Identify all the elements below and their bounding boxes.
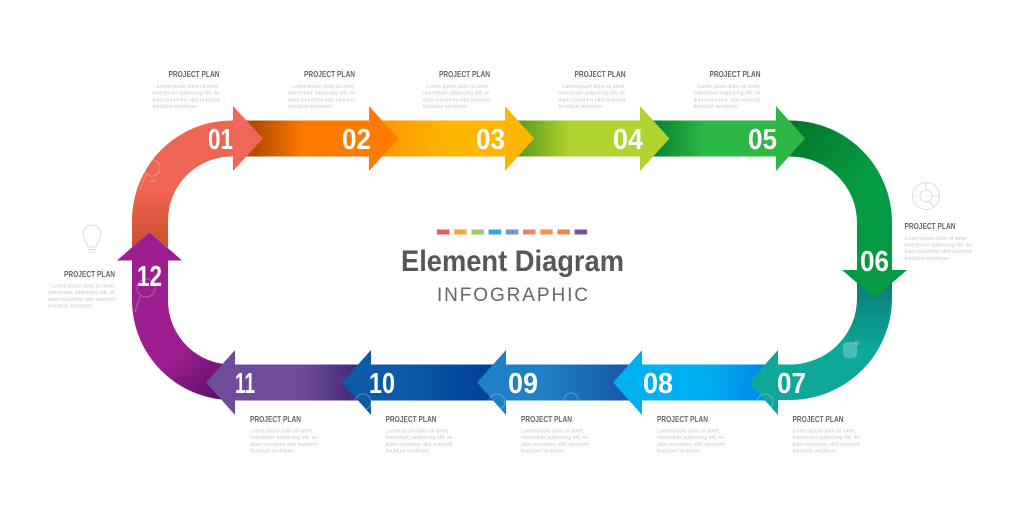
text block 06: Lorem ipsum dolor sit amet,	[904, 236, 968, 242]
text block 06	[904, 222, 972, 262]
text block 11: nsectetuer adipiscing elit, se	[250, 435, 317, 441]
icon: ring chart	[912, 182, 940, 210]
text block 11	[250, 415, 317, 454]
text block 07: tincidunt sectetuer.	[792, 448, 838, 454]
text block 11: diam nonummy nibh euismod	[250, 442, 317, 448]
text block 02: Lorem ipsum dolor sit amet,	[292, 84, 355, 90]
segment 06 curved arrow	[782, 120, 907, 298]
segment 02 arrow: 02	[342, 124, 371, 156]
text block 03: tincidunt sectetuer.	[423, 104, 468, 110]
text block 08: PROJECT PLAN	[657, 415, 708, 424]
text block 09: tincidunt sectetuer.	[521, 448, 566, 454]
text block 09: diam nonummy nibh euismod	[521, 442, 588, 448]
text block 04: tincidunt sectetuer.	[558, 104, 604, 110]
text block 12: diam nonummy nibh euismod	[48, 297, 115, 303]
segment 04 arrow	[515, 106, 670, 171]
text block 05: tincidunt sectetuer.	[694, 104, 739, 110]
text block 11: PROJECT PLAN	[250, 415, 301, 424]
text block 07: diam nonummy nibh euismod	[792, 442, 860, 448]
text block 01: Lorem ipsum dolor sit amet,	[156, 84, 220, 90]
text block 05: Lorem ipsum dolor sit amet,	[698, 84, 761, 90]
segment 12 arrow	[117, 232, 240, 400]
text block 03: nsectetuer adipiscing elit, se	[423, 90, 490, 96]
text block 08: Lorem ipsum dolor sit amet,	[657, 428, 720, 434]
text block 05	[694, 70, 761, 110]
icon: light bulb	[83, 225, 101, 252]
text block 01: nsectetuer adipiscing elit, se	[152, 90, 220, 96]
segment 11 arrow: 11	[235, 368, 255, 400]
segment 08 arrow	[613, 350, 770, 415]
text block 04	[558, 70, 626, 110]
text block 08: nsectetuer adipiscing elit, se	[657, 435, 724, 441]
text block 09: PROJECT PLAN	[521, 415, 572, 424]
text block 03: PROJECT PLAN	[439, 70, 490, 79]
text block 05: diam nonummy nibh euismod	[694, 98, 760, 104]
text block 10: PROJECT PLAN	[386, 415, 437, 424]
segment 07 curved arrow	[749, 268, 892, 415]
text block 06: tincidunt sectetuer.	[904, 256, 950, 262]
text block 04: Lorem ipsum dolor sit amet,	[562, 84, 626, 90]
text block 02: diam nonummy nibh euismod	[288, 98, 355, 104]
text block 05: PROJECT PLAN	[710, 70, 761, 79]
text block 12: Lorem ipsum dolor sit amet,	[52, 284, 115, 290]
segment 05 arrow: 05	[748, 124, 777, 156]
text block 11: tincidunt sectetuer.	[250, 448, 295, 454]
segment 09 arrow	[477, 350, 635, 415]
text block 06: diam nonummy nibh euismod	[904, 249, 972, 255]
text block 04: nsectetuer adipiscing elit, se	[558, 90, 626, 96]
text block 09	[521, 415, 588, 454]
text block 07: nsectetuer adipiscing elit, se	[792, 435, 860, 441]
text block 10: nsectetuer adipiscing elit, se	[386, 435, 452, 441]
text block 10: tincidunt sectetuer.	[386, 448, 431, 454]
text block 07	[792, 415, 860, 454]
text block 02: tincidunt sectetuer.	[288, 104, 333, 110]
text block 09: Lorem ipsum dolor sit amet,	[521, 428, 584, 434]
text block 02: nsectetuer adipiscing elit, se	[288, 90, 355, 96]
segment 10 arrow	[342, 350, 500, 415]
segment 08 arrow: 08	[643, 368, 673, 400]
text block 04: PROJECT PLAN	[574, 70, 626, 79]
segment 06 curved arrow: 06	[860, 246, 889, 278]
segment 10 arrow: 10	[369, 368, 395, 400]
segment 12 arrow: 12	[137, 261, 162, 293]
text block 05: nsectetuer adipiscing elit, se	[694, 90, 760, 96]
segment 01 curved arrow: 01	[208, 124, 233, 156]
text block 08	[657, 415, 724, 454]
text block 01: diam nonummy nibh euismod	[152, 98, 220, 104]
text block 10: Lorem ipsum dolor sit amet,	[386, 428, 449, 434]
segment 05 arrow	[650, 106, 805, 171]
text block 01: tincidunt sectetuer.	[152, 104, 198, 110]
text block 03: diam nonummy nibh euismod	[423, 98, 490, 104]
segment 04 arrow: 04	[613, 124, 643, 156]
title: Element Diagram	[401, 245, 624, 278]
text block 07: PROJECT PLAN	[792, 415, 844, 424]
text block 02	[288, 70, 355, 110]
segment 03 arrow: 03	[476, 124, 505, 156]
text block 06: nsectetuer adipiscing elit, se	[904, 242, 972, 248]
text block 09: nsectetuer adipiscing elit, se	[521, 435, 588, 441]
text block 01	[152, 70, 220, 110]
text block 08: diam nonummy nibh euismod	[657, 442, 724, 448]
segment 03 arrow	[380, 106, 534, 171]
text block 12: tincidunt sectetuer.	[48, 304, 93, 310]
subtitle: INFOGRAPHIC	[437, 285, 588, 306]
segment 09 arrow: 09	[508, 368, 538, 400]
colour dash row	[437, 230, 587, 234]
text block 04: diam nonummy nibh euismod	[558, 98, 626, 104]
segment 11 arrow	[206, 350, 365, 415]
text block 03	[423, 70, 490, 110]
text block 11: Lorem ipsum dolor sit amet,	[250, 428, 313, 434]
text block 12	[48, 270, 115, 310]
text block 07: Lorem ipsum dolor sit amet,	[792, 428, 856, 434]
text block 02: PROJECT PLAN	[304, 70, 355, 79]
segment 01 curved arrow	[132, 106, 263, 248]
text block 06: PROJECT PLAN	[904, 222, 956, 231]
text block 10	[386, 415, 452, 454]
segment 02 arrow	[244, 106, 398, 171]
text block 10: diam nonummy nibh euismod	[386, 442, 452, 448]
text block 01: PROJECT PLAN	[168, 70, 220, 79]
text block 08: tincidunt sectetuer.	[657, 448, 702, 454]
segment 07 curved arrow: 07	[777, 368, 806, 400]
text block 12: PROJECT PLAN	[64, 270, 115, 279]
diagram: looped arrow ring	[117, 106, 907, 415]
text block 12: nsectetuer adipiscing elit, se	[48, 290, 115, 296]
text block 03: Lorem ipsum dolor sit amet,	[427, 84, 490, 90]
